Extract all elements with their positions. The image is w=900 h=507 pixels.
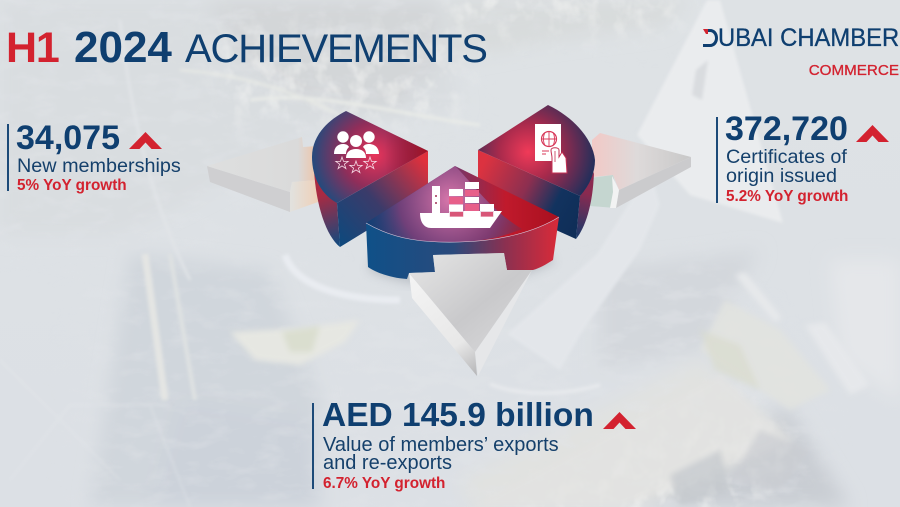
stat: certificates of origin: Certificates of — [726, 146, 847, 168]
stat: value of exports: Value of members’ exports — [323, 434, 559, 456]
icon: passport and hand — [535, 124, 567, 173]
icon: up chevron — [129, 132, 162, 149]
icon: cargo ship — [420, 182, 502, 228]
icon: up chevron — [856, 125, 889, 142]
stat: new memberships — [7, 119, 181, 194]
shadow under pie — [368, 240, 555, 286]
stat: value of exports: 6.7% YoY growth — [323, 475, 445, 492]
arrow: bottom grey arrow — [409, 253, 532, 376]
stat: new memberships: New memberships — [17, 155, 181, 177]
stat: certificates of origin: origin issued — [726, 164, 837, 186]
stat: new memberships: 5% YoY growth — [17, 177, 127, 194]
logo: Dubai Chamber Commerce — [703, 24, 899, 79]
stat: certificates of origin: 5.2% YoY growth — [726, 188, 848, 205]
stat: value of exports — [312, 397, 636, 492]
right pie slice — [478, 105, 595, 239]
texture — [780, 488, 790, 492]
stat: new memberships: 34,075 — [16, 119, 120, 157]
title — [6, 22, 487, 72]
icon: members and stars — [334, 131, 379, 173]
title: 2024 — [74, 22, 172, 72]
stat: certificates of origin — [716, 110, 889, 205]
title: H1 — [6, 24, 59, 72]
arrow: right grey arrow — [590, 133, 691, 208]
front pie slice — [366, 166, 559, 279]
logo: Dubai Chamber Commerce: UBAI CHAMBER — [718, 24, 899, 52]
aerial patches — [230, 272, 870, 507]
stat: value of exports: and re-exports — [323, 452, 452, 474]
title: ACHIEVEMENTS — [185, 27, 487, 71]
left pie slice — [312, 111, 428, 247]
stat: value of exports: AED 145.9 billion — [322, 397, 594, 434]
logo: Dubai Chamber Commerce: COMMERCE — [809, 62, 899, 79]
icon: up chevron — [603, 412, 636, 429]
arrow: left grey arrow — [207, 137, 318, 212]
stat: certificates of origin: 372,720 — [725, 110, 848, 148]
building: pale triangle — [507, 0, 783, 370]
